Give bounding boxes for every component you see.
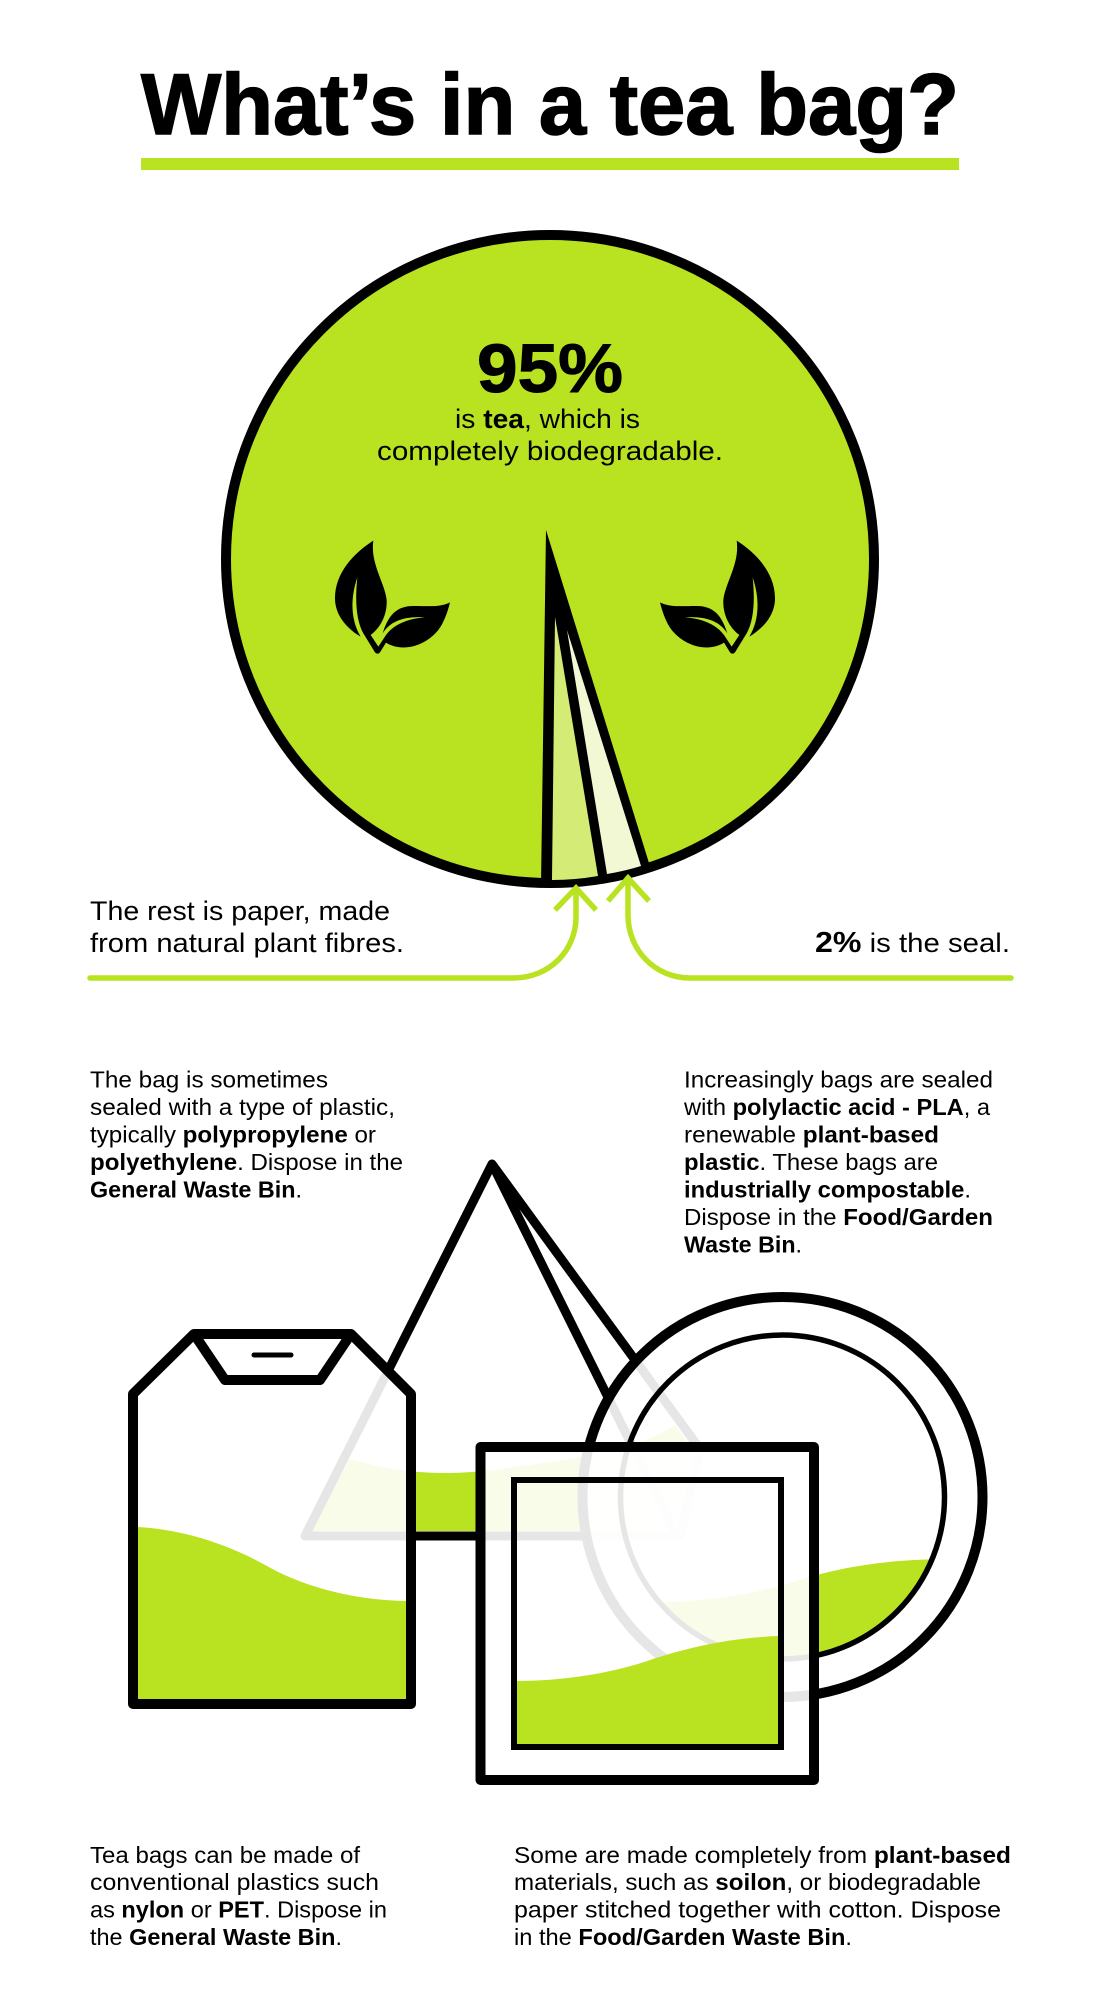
text: PLA seal note: Dispose in the Food/Garden — [684, 1204, 993, 1230]
text: plant-based materials note — [514, 1842, 1011, 1950]
illustration: tea bag shapes — [133, 1164, 982, 1780]
text: plastic seal note: The bag is sometimes — [90, 1066, 328, 1092]
text: PLA seal note: renewable plant-based — [684, 1122, 939, 1148]
text: conventional plastics note: as nylon or PET. Dispose in — [90, 1896, 387, 1922]
pie slice: seal — [567, 630, 641, 874]
text: plastic seal note — [90, 1066, 403, 1202]
text: seal label: 2% is the seal. — [815, 927, 1010, 959]
text: plastic seal note: polyethylene. Dispose in the — [90, 1149, 403, 1175]
icon: left leaves — [335, 541, 450, 654]
statistic: 95% tea: 95% — [477, 330, 623, 407]
text: plastic seal note: General Waste Bin. — [90, 1176, 302, 1202]
text: paper label: The rest is paper, made — [90, 896, 390, 926]
pie wedge outline — [541, 530, 649, 885]
text: PLA seal note: Increasingly bags are sealed — [684, 1066, 993, 1092]
arrow: seal — [608, 878, 1011, 978]
text: plant-based materials note: materials, such as soilon, or biodegradable — [514, 1869, 981, 1895]
text: plant-based materials note: Some are made completely from plant-based — [514, 1842, 1011, 1868]
text: plastic seal note: typically polypropylene or — [90, 1122, 376, 1148]
shape: square tea bag — [480, 1447, 814, 1780]
text: PLA seal note: with polylactic acid - PLA, a — [683, 1094, 991, 1120]
pie chart: tea bag composition — [226, 235, 874, 885]
text: plastic seal note: sealed with a type of plastic, — [90, 1094, 395, 1120]
title: What’s in a tea bag? — [141, 57, 959, 153]
text: PLA seal note: plastic. These bags are — [684, 1149, 938, 1175]
shape: round tea bag — [582, 1297, 982, 1700]
text: conventional plastics note: the General Waste Bin. — [90, 1924, 342, 1950]
arrow: paper — [90, 888, 596, 978]
statistic: 95% tea: is tea, which is — [455, 404, 640, 434]
icon: right leaves — [660, 541, 775, 654]
text: conventional plastics note: conventional plastics such — [90, 1869, 379, 1895]
text: plant-based materials note: paper stitched together with cotton. Dispose — [514, 1896, 1001, 1922]
text: PLA seal note — [683, 1066, 993, 1258]
text: plant-based materials note: in the Food/Garden Waste Bin. — [514, 1924, 852, 1950]
text: conventional plastics note — [90, 1842, 387, 1950]
text: PLA seal note: industrially compostable. — [684, 1176, 971, 1202]
text: PLA seal note: Waste Bin. — [684, 1232, 802, 1258]
shape: rectangular tea bag — [133, 1334, 411, 1704]
text: conventional plastics note: Tea bags can be made of — [90, 1842, 360, 1868]
statistic: 95% tea — [377, 330, 723, 466]
text: paper label — [90, 896, 404, 958]
statistic: 95% tea: completely biodegradable. — [377, 436, 723, 466]
shape: pyramid tea bag — [305, 1164, 700, 1536]
text: paper label: from natural plant fibres. — [90, 928, 404, 958]
pie slice: paper — [552, 617, 598, 880]
